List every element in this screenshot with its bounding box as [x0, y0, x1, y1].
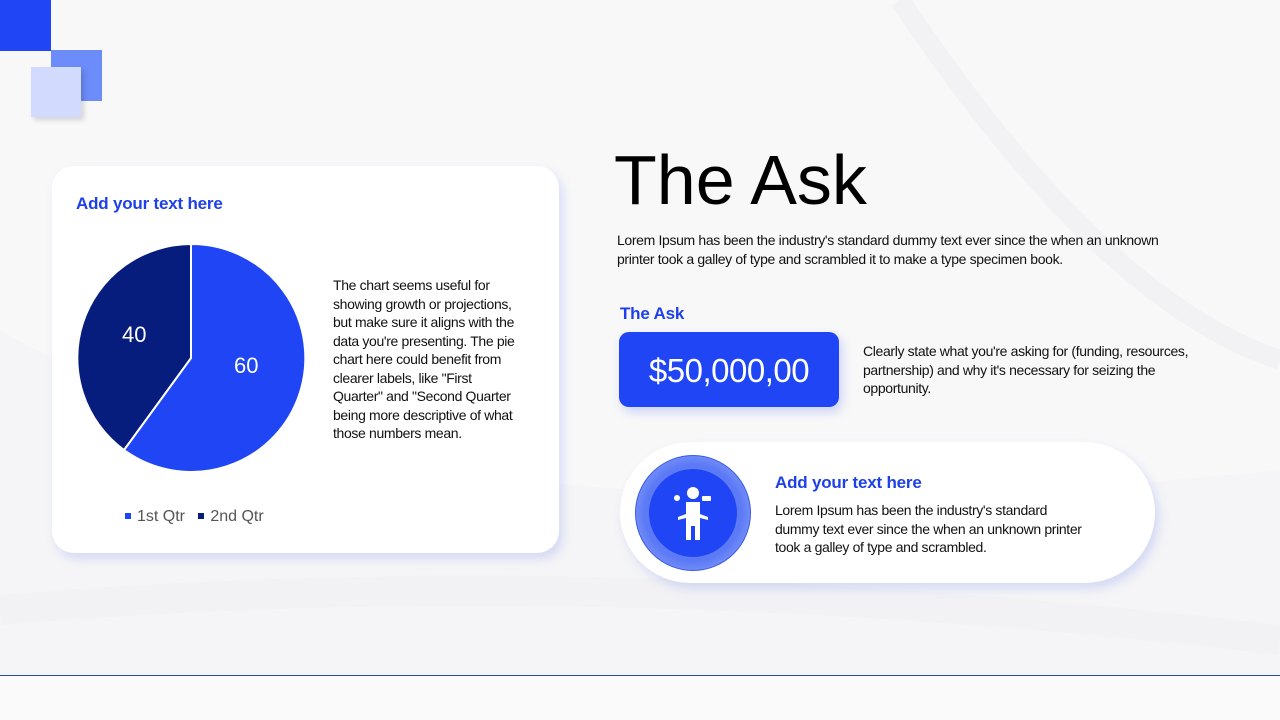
subheading: The Ask: The Ask [620, 304, 684, 323]
legend: 1st Qtr 2nd Qtr [137, 508, 264, 525]
amount description: opportunity. [863, 380, 931, 396]
panel: callout pill [620, 442, 1155, 583]
chart description: being more descriptive of what [333, 406, 512, 422]
pie chart: 40 [122, 322, 146, 347]
callout text [775, 502, 1082, 555]
chart description [333, 277, 514, 441]
callout text: dummy text ever since the when an unknown printer [775, 520, 1082, 536]
callout heading: Add your text here [775, 473, 922, 492]
chart description: The chart seems useful for [333, 277, 490, 293]
chart description: Quarter" and "Second Quarter [333, 388, 511, 404]
callout text: took a galley of type and scrambled. [775, 539, 987, 555]
decorative squares [0, 0, 102, 122]
intro text [617, 232, 1158, 267]
chart description: showing growth or projections, [333, 296, 512, 312]
card heading: Add your text here [76, 194, 223, 213]
amount description [863, 343, 1188, 396]
chart description: those numbers mean. [333, 425, 462, 441]
intro text: printer took a galley of type and scrambled it to make a type specimen book. [617, 250, 1063, 266]
panel: pie chart card [52, 166, 559, 553]
amount description: Clearly state what you're asking for (funding, resources, [863, 343, 1188, 359]
chart description: clearer labels, like "First [333, 370, 472, 386]
amount box [619, 332, 839, 407]
callout text: Lorem Ipsum has been the industry's standard [775, 502, 1047, 518]
title: The Ask [614, 141, 867, 219]
intro text: Lorem Ipsum has been the industry's standard dummy text ever since the when an unknown [617, 232, 1158, 248]
chart description: but make sure it aligns with the [333, 314, 514, 330]
pie chart [78, 245, 304, 471]
pie chart: 60 [234, 353, 258, 378]
amount box: $50,000,00 [649, 352, 809, 389]
amount description: partnership) and why it's necessary for seizing the [863, 362, 1155, 378]
icon: person with ideas [635, 455, 751, 571]
chart description: data you're presenting. The pie [333, 332, 514, 348]
chart description: chart here could benefit from [333, 351, 501, 367]
